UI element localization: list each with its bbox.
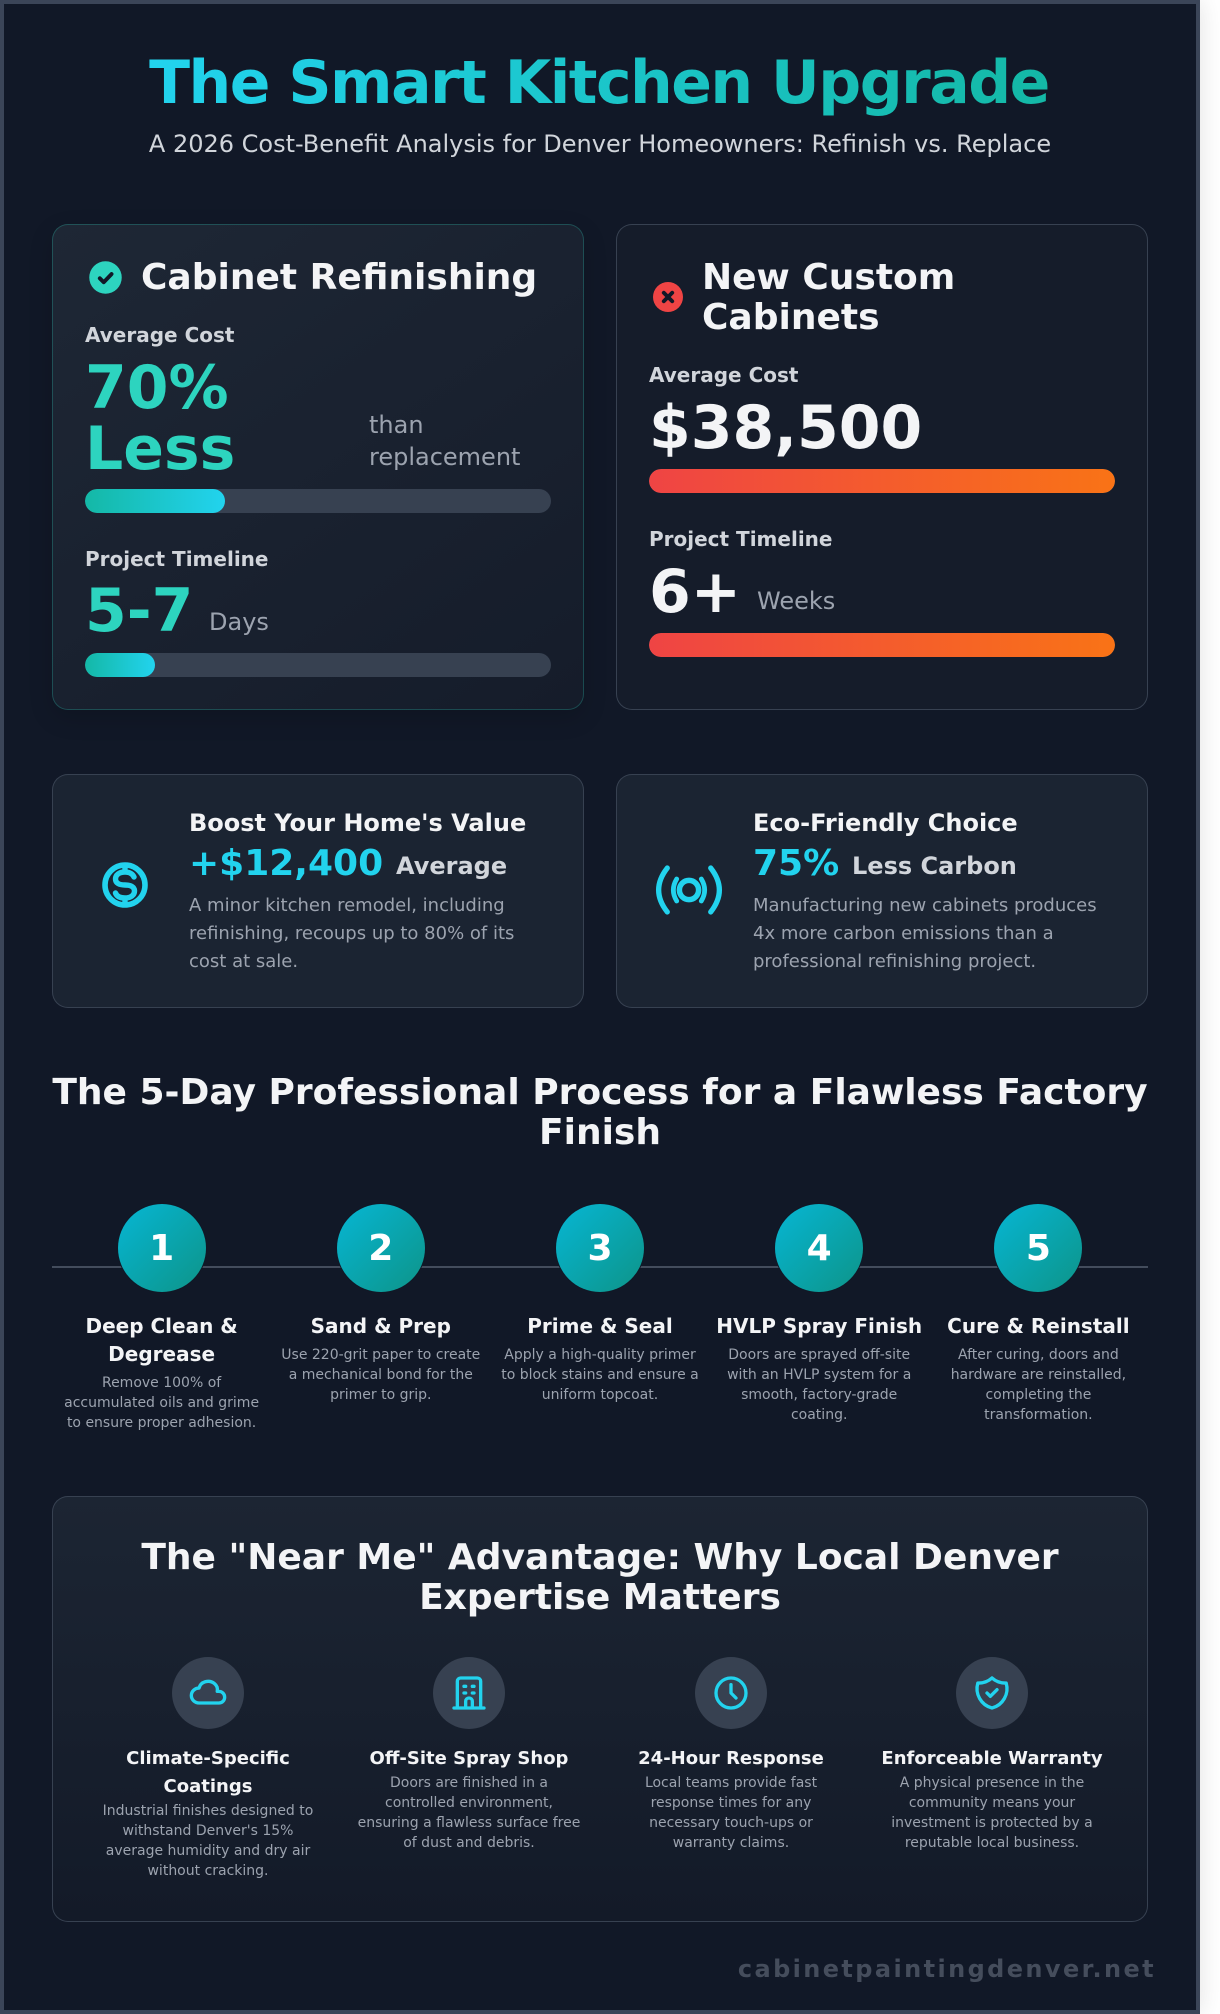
panel: new custom cabinets <box>616 224 1148 710</box>
label: average cost: Average Cost <box>85 323 234 347</box>
step description <box>727 1347 911 1423</box>
heading: near me advantage: Expertise Matters <box>419 1576 781 1618</box>
number 4 <box>775 1204 863 1292</box>
label: project timeline: Project Timeline <box>649 526 832 550</box>
description: average humidity and dry air <box>106 1842 310 1858</box>
step title: Deep Clean & <box>85 1314 238 1338</box>
description: of dust and debris. <box>403 1834 535 1850</box>
step title <box>85 1314 238 1366</box>
number 2 <box>337 1204 425 1292</box>
description <box>645 1774 817 1850</box>
heading: 5-day process: Finish <box>539 1112 661 1152</box>
description: controlled environment, <box>385 1794 553 1810</box>
unit: than replacement: than <box>369 411 424 439</box>
step description: to ensure proper adhesion. <box>67 1415 256 1431</box>
advantage: spray shop <box>358 1657 580 1850</box>
step description: primer to grip. <box>330 1387 431 1403</box>
step title: Cure & Reinstall <box>947 1314 1130 1338</box>
icon: clock <box>695 1657 767 1729</box>
icon: x circle <box>653 282 683 312</box>
step description: Use 220-grit paper to create <box>281 1347 480 1363</box>
number 1: 1 <box>149 1228 174 1269</box>
step title: Sand & Prep <box>311 1314 451 1338</box>
progress bar: cost <box>85 489 551 513</box>
title: Off-Site Spray Shop <box>370 1748 568 1769</box>
description: professional refinishing project. <box>753 951 1036 972</box>
heading: cabinet refinishing: Cabinet Refinishing <box>141 257 537 298</box>
description: Industrial finishes designed to <box>103 1802 313 1818</box>
icon: dollar coin <box>102 862 148 908</box>
step description: Apply a high-quality primer <box>504 1347 696 1363</box>
panel: cabinet refinishing <box>52 224 584 710</box>
step description: transformation. <box>984 1407 1093 1423</box>
title: Climate-Specific <box>126 1748 290 1769</box>
advantage: climate coatings <box>103 1657 313 1878</box>
stat: 5-7: 5-7 <box>85 576 193 646</box>
stat: 6+: 6+ <box>649 557 741 627</box>
step 1 <box>64 1204 259 1431</box>
heading: new custom cabinets <box>702 256 955 338</box>
footer url: cabinetpaintingdenver.net <box>738 1955 1156 1983</box>
advantage: response <box>638 1657 824 1850</box>
description <box>103 1802 313 1878</box>
step 4 <box>716 1204 922 1423</box>
step title: HVLP Spray Finish <box>716 1314 922 1338</box>
heading: new custom cabinets: New Custom <box>702 256 955 298</box>
step description: uniform topcoat. <box>542 1387 658 1403</box>
stat: 70% less: Less <box>85 414 235 484</box>
stat: 75%: 75% <box>753 843 839 884</box>
heading: Eco-Friendly Choice <box>753 809 1018 837</box>
title: Enforceable Warranty <box>881 1748 1103 1769</box>
heading: Boost Your Home's Value <box>189 809 526 837</box>
advantage: warranty <box>881 1657 1103 1850</box>
number 5: 5 <box>1026 1228 1051 1269</box>
heading: 5-day process: The 5-Day Professional Process for a Flawless Factory <box>52 1072 1148 1112</box>
description: A physical presence in the <box>900 1774 1084 1790</box>
number 2: 2 <box>368 1228 393 1269</box>
label: average cost: Average Cost <box>649 363 798 387</box>
step description: with an HVLP system for a <box>727 1367 911 1383</box>
icon: broadcast waves <box>656 865 722 915</box>
description <box>358 1774 580 1850</box>
step 3 <box>501 1204 699 1403</box>
number 4: 4 <box>807 1228 832 1269</box>
stat: $38,500: $38,500 <box>649 393 922 463</box>
unit: than replacement: replacement <box>369 443 520 471</box>
description: investment is protected by a <box>891 1814 1093 1830</box>
description <box>189 895 514 972</box>
progress bar: timeline <box>85 653 551 677</box>
step title: Degrease <box>108 1342 215 1366</box>
stat: 70% less: 70% <box>85 353 229 423</box>
label: project timeline: Project Timeline <box>85 546 268 570</box>
step description: Remove 100% of <box>102 1375 221 1391</box>
stat unit: Average <box>396 852 507 880</box>
description: necessary touch-ups or <box>649 1814 813 1830</box>
title <box>126 1748 290 1797</box>
icon: shield check <box>956 1657 1028 1729</box>
title: 24-Hour Response <box>638 1748 824 1769</box>
step 5 <box>947 1204 1130 1423</box>
step description: hardware are reinstalled, <box>951 1367 1126 1383</box>
description: Local teams provide fast <box>645 1774 817 1790</box>
step description: completing the <box>985 1387 1091 1403</box>
panel: boost your home's value <box>52 774 584 1008</box>
description: Manufacturing new cabinets produces <box>753 895 1097 916</box>
description: Doors are finished in a <box>390 1774 548 1790</box>
icon: cloud <box>172 1657 244 1729</box>
progress bar: timeline <box>649 633 1115 657</box>
description: warranty claims. <box>673 1834 789 1850</box>
stat unit: Less Carbon <box>852 852 1017 880</box>
connector line <box>52 1266 1148 1268</box>
description: reputable local business. <box>905 1834 1079 1850</box>
step description: coating. <box>791 1407 847 1423</box>
title: Coatings <box>164 1776 252 1797</box>
icon: check circle <box>89 261 122 294</box>
description: withstand Denver's 15% <box>123 1822 293 1838</box>
number 3 <box>556 1204 644 1292</box>
step title: Prime & Seal <box>527 1314 673 1338</box>
heading: 5-day process <box>52 1072 1148 1152</box>
step description: smooth, factory-grade <box>741 1387 897 1403</box>
description: ensuring a flawless surface free <box>358 1814 580 1830</box>
heading: near me advantage: The "Near Me" Advantage: Why Local Denver <box>141 1536 1059 1578</box>
description <box>891 1774 1093 1850</box>
unit: days: Days <box>209 608 269 636</box>
step description <box>281 1347 480 1403</box>
description: without cracking. <box>147 1862 269 1878</box>
description: refinishing, recoups up to 80% of its <box>189 923 514 944</box>
panel: near me advantage <box>52 1496 1148 1922</box>
description: 4x more carbon emissions than a <box>753 923 1054 944</box>
heading: near me advantage <box>141 1536 1059 1618</box>
step description: Doors are sprayed off-site <box>728 1347 910 1363</box>
unit: than replacement <box>369 411 520 471</box>
unit: weeks: Weeks <box>757 587 835 615</box>
step description: accumulated oils and grime <box>64 1395 259 1411</box>
number 5 <box>994 1204 1082 1292</box>
number 3: 3 <box>587 1228 613 1269</box>
process timeline <box>52 1266 1148 1268</box>
description: A minor kitchen remodel, including <box>189 895 505 916</box>
subtitle: A 2026 Cost-Benefit Analysis for Denver Homeowners: Refinish vs. Replace <box>149 130 1051 158</box>
description <box>753 895 1097 972</box>
stat: 70% less <box>85 353 235 484</box>
step description: a mechanical bond for the <box>289 1367 473 1383</box>
panel: eco-friendly choice <box>616 774 1148 1008</box>
step description: After curing, doors and <box>958 1347 1119 1363</box>
heading: new custom cabinets: Cabinets <box>702 296 880 338</box>
stat: +$12,400: +$12,400 <box>189 843 383 884</box>
step description <box>951 1347 1126 1423</box>
description: cost at sale. <box>189 951 298 972</box>
step description <box>501 1347 699 1403</box>
description: response times for any <box>651 1794 811 1810</box>
icon: building <box>433 1657 505 1729</box>
step description <box>64 1375 259 1431</box>
progress bar: cost <box>649 469 1115 493</box>
number 1 <box>118 1204 206 1292</box>
step 2 <box>281 1204 480 1403</box>
step description: to block stains and ensure a <box>501 1367 699 1383</box>
description: community means your <box>909 1794 1075 1810</box>
title: The Smart Kitchen Upgrade <box>149 48 1049 118</box>
